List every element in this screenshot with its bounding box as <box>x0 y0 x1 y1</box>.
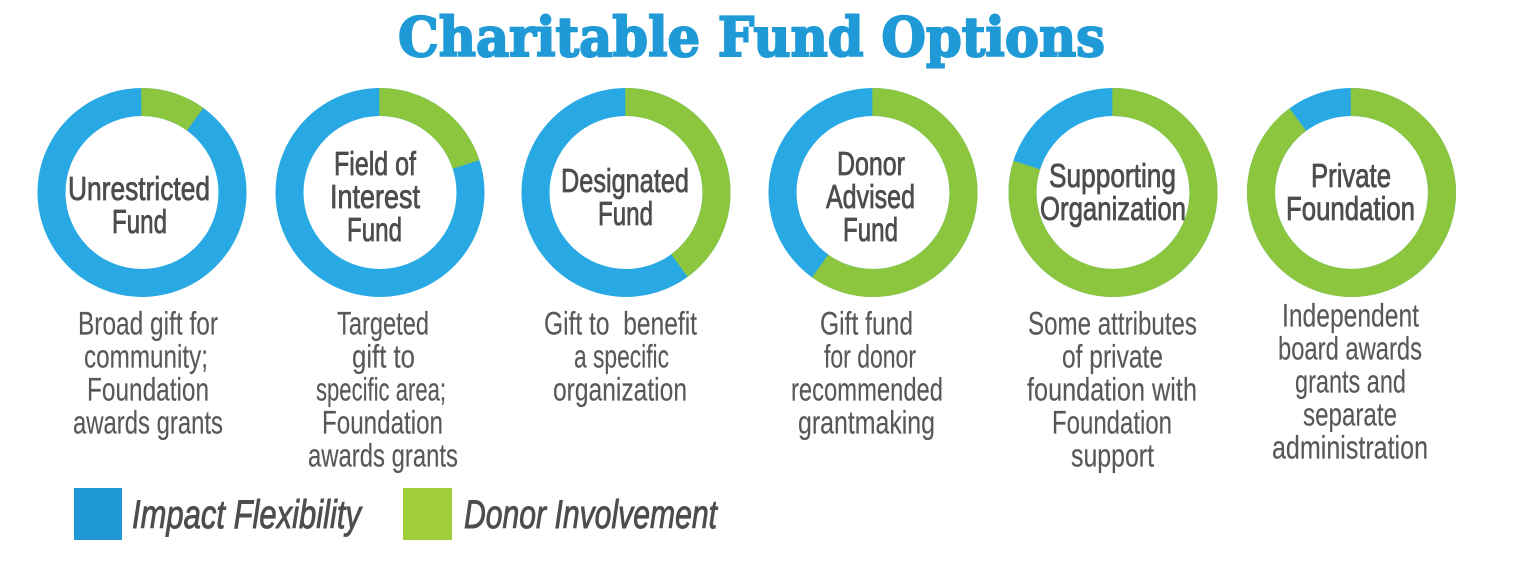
description: Unrestricted Fund: awards grants <box>73 404 223 440</box>
donut chart: 90% donor involvement <box>1261 102 1442 283</box>
description: Designated Fund: organization <box>553 372 687 408</box>
description: Field of Interest Fund: Targeted <box>337 306 429 342</box>
legend label: donor involvement: Donor Involvement <box>464 493 718 537</box>
description: Supporting Organization: Some attributes <box>1028 306 1197 342</box>
donut chart: 10% donor involvement <box>52 102 232 283</box>
panel: Field of Interest Fund <box>290 102 470 474</box>
description: Private Foundation <box>1272 298 1428 466</box>
legend <box>74 488 718 540</box>
description: Private Foundation: administration <box>1272 430 1428 466</box>
heading: Supporting Organization: Organization <box>1040 190 1186 227</box>
legend swatch: impact flexibility <box>74 488 122 540</box>
title: Charitable Fund Options <box>398 5 1105 69</box>
description: Field of Interest Fund: specific area; <box>316 372 446 408</box>
description: Private Foundation: Independent <box>1282 298 1419 334</box>
heading: Supporting Organization <box>1040 157 1186 227</box>
heading: Field of Interest Fund: Fund <box>347 211 402 248</box>
description: Supporting Organization: support <box>1071 438 1154 474</box>
heading: Unrestricted Fund: Fund <box>112 203 167 240</box>
donut chart: 20% donor involvement <box>290 102 470 283</box>
description: Field of Interest Fund: Foundation <box>322 404 443 440</box>
description: Unrestricted Fund: community; <box>84 338 208 374</box>
heading: Supporting Organization: Supporting <box>1049 157 1176 194</box>
legend label: impact flexibility: Impact Flexibility <box>132 493 363 537</box>
description: Donor Advised Fund <box>791 306 943 440</box>
description: Supporting Organization <box>1027 306 1197 474</box>
description: Designated Fund: Gift to benefit <box>544 306 697 342</box>
description: Supporting Organization: foundation with <box>1027 372 1197 408</box>
heading: Unrestricted Fund <box>68 170 210 240</box>
heading: Donor Advised Fund <box>826 145 915 248</box>
heading: Designated Fund <box>561 162 689 232</box>
panel: Supporting Organization <box>1022 102 1204 474</box>
heading: Private Foundation: Foundation <box>1286 190 1415 227</box>
description: Supporting Organization: Foundation <box>1052 404 1172 440</box>
description: Donor Advised Fund: recommended <box>791 372 943 408</box>
heading: Field of Interest Fund: Field of <box>334 145 417 182</box>
description: Private Foundation: grants and <box>1295 364 1406 400</box>
donut chart: 40% donor involvement <box>536 102 716 283</box>
heading: Donor Advised Fund: Donor <box>837 145 905 182</box>
description: Donor Advised Fund: grantmaking <box>798 404 935 440</box>
heading: Donor Advised Fund: Advised <box>826 178 915 215</box>
heading: Designated Fund: Designated <box>561 162 689 199</box>
heading: Private Foundation <box>1286 157 1415 227</box>
heading: Private Foundation: Private <box>1311 157 1391 194</box>
panel: Designated Fund <box>536 102 716 408</box>
heading: Donor Advised Fund: Fund <box>843 211 898 248</box>
legend swatch: donor involvement <box>403 488 452 540</box>
description: Donor Advised Fund: Gift fund <box>820 306 913 342</box>
description: Unrestricted Fund: Broad gift for <box>78 306 218 342</box>
description: Private Foundation: separate <box>1303 396 1397 432</box>
description: Private Foundation: board awards <box>1278 330 1422 366</box>
panel: Unrestricted Fund <box>52 102 232 440</box>
heading: Designated Fund: Fund <box>598 195 653 232</box>
description: Unrestricted Fund <box>73 306 223 440</box>
description: Unrestricted Fund: Foundation <box>87 372 209 408</box>
heading: Unrestricted Fund: Unrestricted <box>68 170 210 207</box>
heading: Field of Interest Fund <box>330 145 420 248</box>
description: Field of Interest Fund: gift to <box>352 338 415 374</box>
donut chart: 80% donor involvement <box>1022 102 1204 283</box>
heading: Field of Interest Fund: Interest <box>330 178 420 215</box>
description: Donor Advised Fund: for donor <box>824 338 916 374</box>
description: Supporting Organization: of private <box>1062 338 1163 374</box>
donut chart: 60% donor involvement <box>782 102 964 283</box>
description: Designated Fund <box>544 306 697 408</box>
description: Field of Interest Fund <box>308 306 458 474</box>
panel: Donor Advised Fund <box>782 102 964 440</box>
description: Field of Interest Fund: awards grants <box>308 438 458 474</box>
description: Designated Fund: a specific <box>574 338 669 374</box>
panel: Private Foundation <box>1261 102 1442 466</box>
